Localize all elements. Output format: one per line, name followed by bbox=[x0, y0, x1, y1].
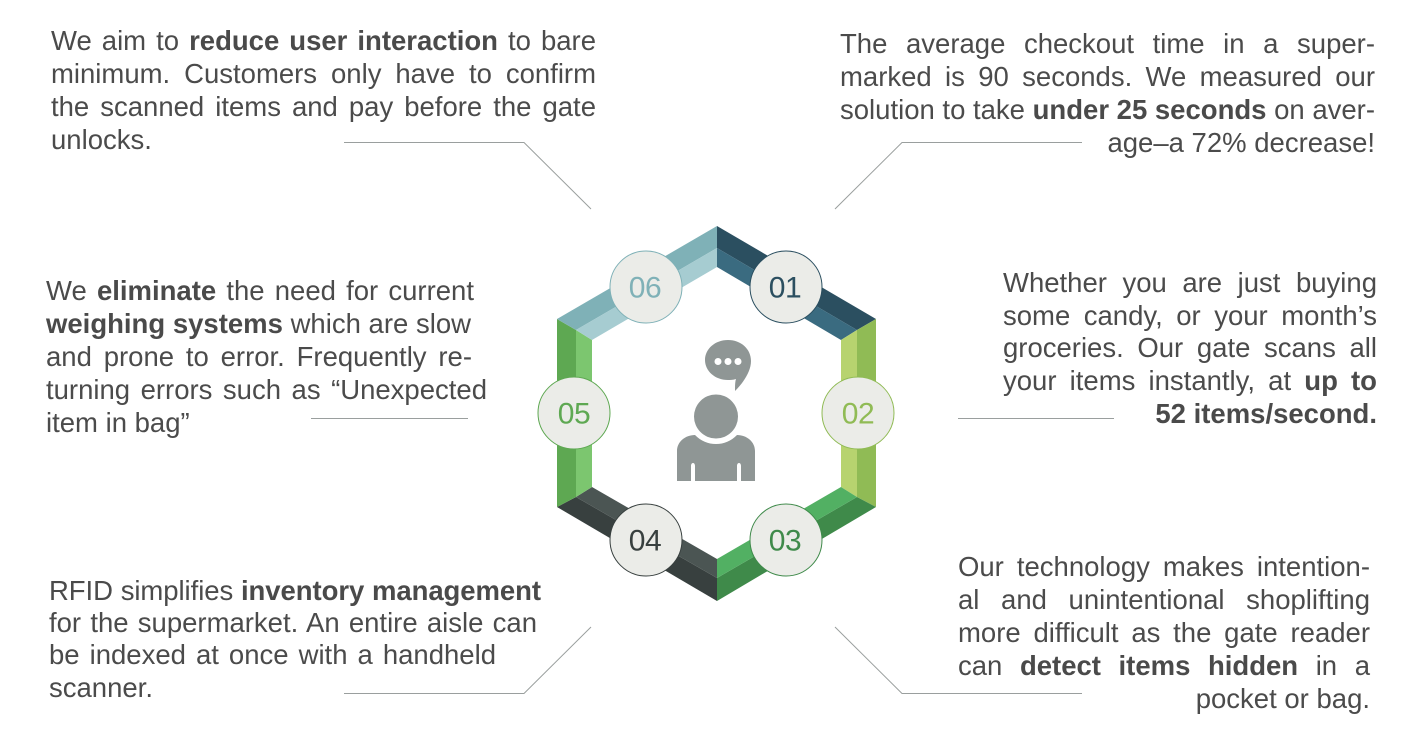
text block: shoplifting detection: more difficult as the gate reader bbox=[958, 617, 1370, 648]
text block: eliminate weighing systems: weighing systems which are slow bbox=[46, 308, 471, 339]
hexagon segment 03 bbox=[717, 487, 876, 601]
hexagon segment 06 bbox=[557, 226, 717, 340]
text block: inventory management bbox=[49, 575, 541, 703]
text block: checkout time: marked is 90 seconds. We measured our bbox=[840, 61, 1375, 92]
text block: inventory management: be indexed at once with a handheld bbox=[49, 639, 496, 670]
text block: checkout time: The average checkout time in a super- bbox=[840, 28, 1375, 59]
text block: reduce user interaction: We aim to reduce user interaction to bare bbox=[51, 25, 596, 56]
icon: speech bubble bbox=[705, 340, 751, 391]
text block: scans items instantly: groceries. Our gate scans all bbox=[1003, 332, 1377, 363]
badge 03: 03 bbox=[769, 524, 801, 558]
text block: scans items instantly: some candy, or your month’s bbox=[1003, 300, 1377, 331]
badge 05: 05 bbox=[558, 398, 590, 430]
text block: scans items instantly: your items instantly, at up to bbox=[1003, 365, 1377, 396]
text block: reduce user interaction: unlocks. bbox=[51, 124, 152, 155]
hexagon segment 05 bbox=[557, 319, 592, 507]
connector lines bbox=[311, 142, 1114, 694]
icon: person bbox=[677, 394, 755, 481]
badge 01: 01 bbox=[769, 272, 801, 304]
text block: shoplifting detection: pocket or bag. bbox=[1196, 683, 1370, 714]
badge 02 bbox=[822, 377, 894, 449]
text block: reduce user interaction bbox=[51, 25, 596, 155]
text block: shoplifting detection bbox=[958, 551, 1370, 714]
text block: inventory management: for the supermarket. An entire aisle can bbox=[49, 607, 537, 638]
text block: shoplifting detection: Our technology makes intention- bbox=[958, 551, 1370, 582]
text block: reduce user interaction: minimum. Customers only have to confirm bbox=[51, 58, 596, 89]
badge 06: 06 bbox=[629, 272, 661, 304]
text block: checkout time: solution to take under 25 seconds on aver- bbox=[840, 94, 1375, 125]
badge 05 bbox=[538, 377, 610, 449]
badge 01 bbox=[750, 251, 822, 323]
hexagon segment 02 bbox=[841, 319, 876, 507]
text block: eliminate weighing systems: We eliminate the need for current bbox=[46, 275, 474, 306]
text block: eliminate weighing systems: turning errors such as “Unexpected bbox=[46, 374, 487, 405]
hexagon segment 01 bbox=[717, 226, 876, 340]
text block: eliminate weighing systems: and prone to error. Frequently re- bbox=[46, 341, 472, 372]
badge 02: 02 bbox=[842, 398, 874, 430]
text block: scans items instantly: Whether you are just buying bbox=[1003, 267, 1377, 298]
text block: reduce user interaction: the scanned items and pay before the gate bbox=[51, 91, 596, 122]
badge 04 bbox=[610, 504, 682, 576]
text block: inventory management: RFID simplifies inventory management bbox=[49, 575, 541, 606]
badge 04: 04 bbox=[629, 524, 661, 558]
badge 03 bbox=[750, 504, 822, 576]
text block: shoplifting detection: al and unintentional shoplifting bbox=[958, 584, 1370, 615]
text block: scans items instantly: 52 items/second. bbox=[1155, 398, 1377, 429]
badge 06 bbox=[610, 251, 682, 323]
text block: inventory management: scanner. bbox=[49, 672, 153, 703]
hexagon segment 04 bbox=[557, 487, 717, 601]
text block: eliminate weighing systems: item in bag” bbox=[46, 407, 190, 438]
text block: checkout time bbox=[840, 28, 1375, 158]
text block: eliminate weighing systems bbox=[46, 275, 487, 438]
text block: shoplifting detection: can detect items hidden in a bbox=[958, 650, 1370, 681]
text block: checkout time: age–a 72% decrease! bbox=[1107, 127, 1375, 158]
text block: scans items instantly bbox=[1003, 267, 1377, 429]
